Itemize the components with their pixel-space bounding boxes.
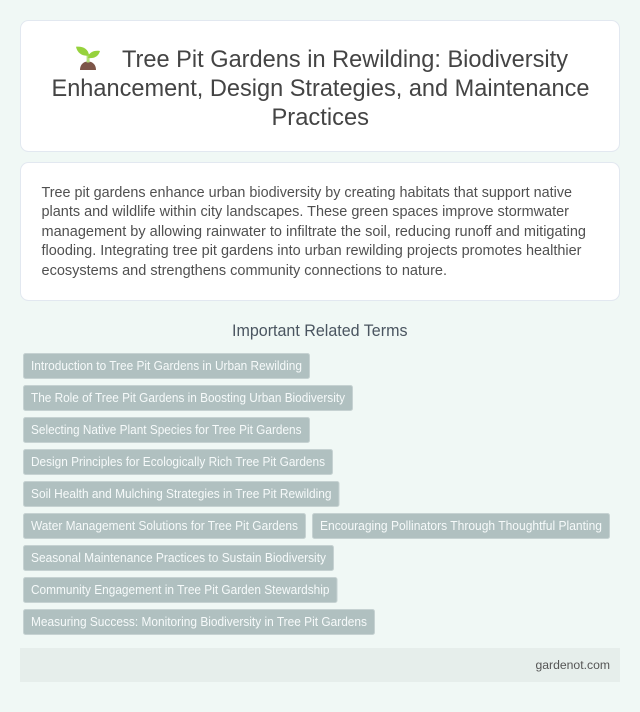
tag: seasonal maintenance — [24, 546, 334, 570]
tag: introduction: Introduction to Tree Pit Gardens in Urban Rewilding — [31, 359, 302, 373]
footer bar — [20, 648, 620, 682]
tag: native species: Selecting Native Plant Species for Tree Pit Gardens — [31, 423, 302, 437]
heading: title — [52, 46, 590, 131]
text block: summary: flooding. Integrating tree pit gardens into urban rewilding projects promotes healthier — [42, 243, 582, 259]
heading: title: Tree Pit Gardens in Rewilding: Biodiversity — [122, 46, 569, 73]
tag: measuring success — [24, 610, 374, 634]
tag: native species — [24, 418, 310, 442]
tag: role: The Role of Tree Pit Gardens in Boosting Urban Biodiversity — [31, 391, 346, 405]
tag: water management — [24, 514, 306, 538]
tag: introduction — [24, 354, 310, 378]
tag: community engagement — [24, 578, 337, 602]
tag: soil health — [24, 482, 339, 506]
heading: title: Enhancement, Design Strategies, and Maintenance — [52, 75, 590, 102]
heading: important related terms: Important Related Terms — [232, 322, 408, 340]
tag: pollinators — [312, 514, 610, 538]
panel: summary card — [20, 162, 620, 300]
tag: soil health: Soil Health and Mulching Strategies in Tree Pit Rewilding — [31, 487, 332, 501]
text block: summary: plants and wildlife within city landscapes. These green spaces improve stormwater — [42, 204, 569, 220]
panel: title card — [20, 20, 620, 152]
heading: title: Practices — [272, 104, 369, 131]
footer source text: gardenot.com — [536, 658, 610, 672]
tag: role — [24, 386, 352, 410]
tag: pollinators: Encouraging Pollinators Through Thoughtful Planting — [320, 519, 602, 533]
text block: summary: management by allowing rainwater to infiltrate the soil, reducing runoff and mitigating — [42, 224, 586, 240]
tag: seasonal maintenance: Seasonal Maintenance Practices to Sustain Biodiversity — [31, 551, 327, 565]
text block: summary: Tree pit gardens enhance urban biodiversity by creating habitats that support native — [42, 185, 572, 201]
text block: summary — [42, 185, 586, 279]
text block: summary: ecosystems and strengthens community connections to nature. — [42, 263, 447, 279]
tag: design principles — [24, 450, 332, 474]
tag list — [24, 354, 610, 634]
tag: measuring success: Measuring Success: Monitoring Biodiversity in Tree Pit Gardens — [31, 615, 367, 629]
tag: community engagement: Community Engagement in Tree Pit Garden Stewardship — [31, 583, 330, 597]
tag: water management: Water Management Solutions for Tree Pit Gardens — [31, 519, 298, 533]
tag: design principles: Design Principles for Ecologically Rich Tree Pit Gardens — [31, 455, 325, 469]
icon: sprout — [76, 47, 100, 70]
